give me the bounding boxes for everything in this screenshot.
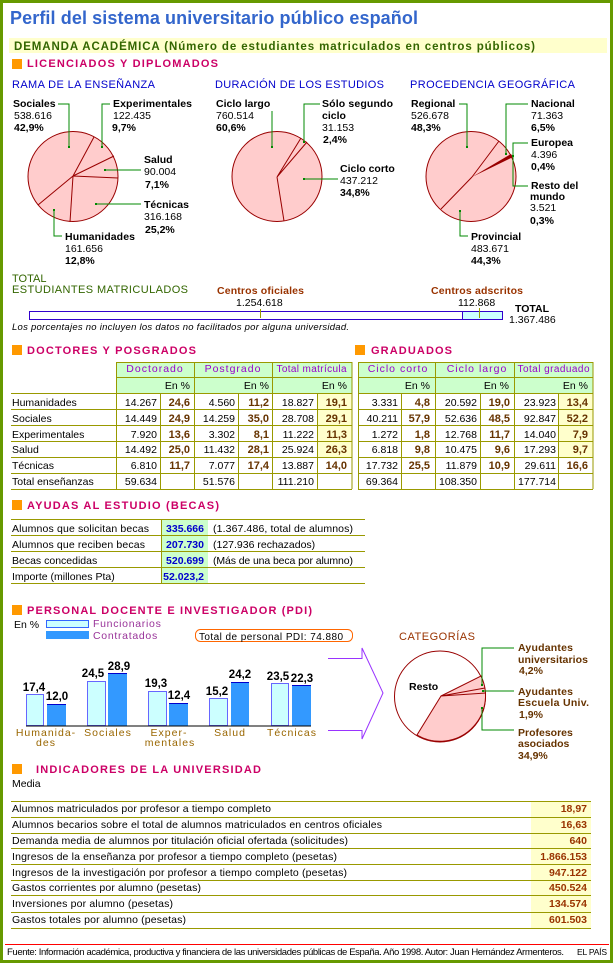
label: ayudantes universitarios: 4,2% — [519, 665, 544, 677]
label: ciclo largo: Ciclo largo — [216, 98, 270, 110]
table: graduados: 25,5 — [409, 460, 430, 472]
label: sólo segundo ciclo: 31.153 — [322, 122, 354, 134]
label: sólo segundo ciclo — [322, 98, 393, 146]
label: resto del mundo: Resto del — [531, 180, 578, 192]
panel: rama de la enseñanza — [12, 78, 192, 267]
heading: indicadores de la universidad: INDICADORES DE LA UNIVERSIDAD — [36, 764, 261, 776]
bar chart: personal docente: 23,5 — [267, 671, 290, 683]
table: graduados: 57,9 — [409, 413, 430, 425]
label: regional — [411, 98, 455, 134]
table: indicadores: 947.122 — [549, 867, 587, 879]
bar chart: personal docente: Técnicas — [267, 727, 317, 739]
legend — [14, 618, 162, 642]
leader lines: procedencia — [459, 104, 528, 236]
label: europea: 0,4% — [531, 161, 556, 173]
panel: procedencia geográfica — [410, 78, 578, 267]
table: graduados: 11,7 — [489, 429, 510, 441]
legend: Funcionarios — [93, 618, 162, 630]
label: ciclo largo: 60,6% — [216, 122, 246, 134]
table: indicadores: Gastos totales por alumno (pesetas) — [12, 914, 186, 926]
table: graduados: 11.879 — [446, 460, 477, 472]
table: graduados: 10,9 — [489, 460, 510, 472]
heading: personal docente e investigador: PERSONAL DOCENTE E INVESTIGADOR (PDI) — [27, 605, 312, 617]
table: graduados: Total graduado — [518, 364, 590, 375]
table: graduados: En % — [405, 380, 430, 392]
bar chart: personal docente: 19,3 — [145, 678, 167, 690]
label: salud: 90.004 — [144, 166, 176, 178]
table: doctores y posgrados: En % — [244, 380, 269, 392]
title: Perfil del sistema universitario público español — [10, 8, 418, 28]
table: graduados: 4,8 — [415, 397, 430, 409]
label: centros oficiales — [217, 285, 304, 309]
table: becas: 520.699 — [166, 555, 204, 567]
label: regional: 526.678 — [411, 110, 449, 122]
table: doctores y posgrados: 35,0 — [248, 413, 269, 425]
bar chart: personal docente: 28,9 — [108, 661, 130, 673]
table: graduados: 69.364 — [366, 476, 398, 488]
table: graduados: 52.636 — [445, 413, 477, 425]
label: provincial: 44,3% — [471, 255, 501, 267]
table: doctores y posgrados: 25,0 — [169, 444, 190, 456]
table: graduados: 16,6 — [567, 460, 588, 472]
label: ciclo corto — [340, 163, 395, 199]
label: europea: 4.396 — [531, 149, 557, 161]
table: indicadores: 640 — [569, 835, 587, 847]
table: doctores y posgrados: En % — [322, 380, 347, 392]
note: Los porcentajes no incluyen los datos no facilitados por alguna universidad. — [12, 322, 349, 333]
label: sociales — [13, 98, 56, 134]
leader lines: categorías — [481, 648, 514, 730]
panel: duración de los estudios: DURACIÓN DE LOS ESTUDIOS — [215, 78, 384, 91]
label: centros oficiales: 1.254.618 — [236, 297, 283, 309]
table: doctores y posgrados: 51.576 — [203, 476, 235, 488]
label: experimentales — [112, 98, 192, 134]
table: graduados: 9,7 — [573, 444, 588, 456]
label: sociales: Sociales — [13, 98, 56, 110]
label: ayudantes escuela univ: 1,9% — [519, 709, 544, 721]
label: humanidades: Humanidades — [65, 231, 135, 243]
table: doctores y posgrados: 111.210 — [278, 476, 314, 488]
table: graduados: 19,0 — [489, 397, 510, 409]
table: indicadores: Inversiones por alumno (pesetas) — [12, 898, 173, 910]
panel: duración de los estudios — [215, 78, 395, 222]
label: ayudantes universitarios: universitarios — [518, 654, 588, 666]
label: provincial — [471, 231, 521, 267]
table: doctores y posgrados — [11, 362, 352, 490]
table: graduados: 17.732 — [366, 460, 398, 472]
label: total — [509, 303, 556, 326]
legend: Contratados — [93, 630, 158, 642]
label: centros adscritos: Centros adscritos — [431, 285, 523, 297]
label: ciclo largo — [216, 98, 270, 134]
table: graduados: Ciclo corto — [368, 363, 428, 375]
table: graduados: 9,8 — [415, 444, 430, 456]
table: indicadores: 134.574 — [549, 898, 587, 910]
bar chart: personal docente: Humanida- — [16, 727, 76, 739]
label: ayudantes universitarios — [518, 642, 588, 677]
table: becas: (Más de una beca por alumno) — [213, 555, 353, 567]
table: graduados: 17.293 — [524, 444, 556, 456]
table: doctores y posgrados: 25.924 — [282, 444, 314, 456]
table: doctores y posgrados: 28.708 — [282, 413, 314, 425]
label: salud: 7,1% — [145, 179, 170, 191]
table: doctores y posgrados: 4.560 — [209, 397, 235, 409]
label: técnicas: Técnicas — [144, 199, 189, 211]
panel: total estudiantes matriculados — [12, 273, 556, 333]
table: becas: (127.936 rechazados) — [213, 539, 315, 551]
table: graduados: 40.211 — [367, 413, 398, 425]
table: doctores y posgrados: 29,1 — [326, 413, 347, 425]
panel: rama de la enseñanza: RAMA DE LA ENSEÑANZA — [12, 78, 156, 91]
label: sociales: 538.616 — [14, 110, 52, 122]
label: sociales: 42,9% — [14, 122, 44, 134]
table: becas: Alumnos que solicitan becas — [12, 523, 149, 535]
label: experimentales: Experimentales — [113, 98, 192, 110]
table: doctores y posgrados: 13,6 — [169, 429, 190, 441]
table: graduados: 12.768 — [445, 429, 477, 441]
table: becas: 207.730 — [166, 539, 204, 551]
leader lines: duración — [271, 104, 338, 180]
pie chart: categorías — [394, 651, 486, 742]
table: graduados: 6.818 — [372, 444, 398, 456]
bar chart: personal docente: 24,2 — [229, 669, 251, 681]
table: becas: Alumnos que reciben becas — [12, 539, 145, 551]
bar chart: personal docente: 15,2 — [206, 686, 228, 698]
table: doctores y posgrados: 14.267 — [125, 397, 157, 409]
label: resto del mundo: 0,3% — [530, 215, 555, 227]
table: doctores y posgrados: 11.432 — [204, 444, 235, 456]
bar chart: personal docente: 24,5 — [82, 668, 105, 680]
table: doctores y posgrados: 6.810 — [131, 460, 157, 472]
label: centros adscritos: 112.868 — [458, 297, 495, 309]
footer: Fuente: Información académica, productiva y financiera de las universidades públicas de España. Año 1998. Autor: Juan Hernández Armenteros. — [7, 947, 564, 958]
label: ayudantes escuela univ: Escuela Univ. — [518, 697, 589, 709]
label: salud: Salud — [144, 154, 173, 166]
label: ciclo corto: 437.212 — [340, 175, 378, 187]
label: nacional: 6,5% — [531, 122, 556, 134]
table: doctores y posgrados: 14.259 — [203, 413, 235, 425]
table: doctores y posgrados: Salud — [12, 444, 39, 456]
heading: graduados: GRADUADOS — [371, 345, 452, 357]
label: profesores asociados — [518, 727, 573, 762]
table: graduados: 1.272 — [372, 429, 398, 441]
bar chart: personal docente — [16, 661, 317, 749]
table: graduados: 108.350 — [439, 476, 477, 488]
table: graduados: 13,4 — [567, 397, 589, 409]
table: doctores y posgrados: 3.302 — [209, 429, 235, 441]
bar chart: personal docente: des — [36, 737, 56, 749]
table: becas: Becas concedidas — [12, 555, 97, 567]
table: indicadores: Gastos corrientes por alumno (pesetas) — [12, 882, 201, 894]
table: graduados: 177.714 — [518, 476, 556, 488]
table: doctores y posgrados: 11,7 — [169, 460, 190, 472]
label: resto del mundo — [530, 180, 578, 227]
label: resto del mundo: 3.521 — [530, 202, 556, 214]
label: ciclo corto: 34,8% — [340, 187, 370, 199]
bar chart: personal docente: Sociales — [84, 727, 132, 739]
table: graduados: En % — [563, 380, 588, 392]
table: indicadores: 601.503 — [549, 914, 587, 926]
label: humanidades: 12,8% — [65, 255, 95, 267]
label: profesores asociados: asociados — [518, 738, 570, 750]
legend: En % — [14, 619, 39, 631]
table: graduados: 20.592 — [445, 397, 477, 409]
label: humanidades — [65, 231, 135, 267]
table: graduados: 7,9 — [573, 429, 588, 441]
label: media: Media — [12, 778, 41, 790]
table: indicadores: 16,63 — [561, 819, 587, 831]
bar chart: personal docente: mentales — [145, 737, 195, 749]
table: indicadores: Alumnos matriculados por profesor a tiempo completo — [12, 803, 271, 815]
pie chart: categorías: Resto — [409, 681, 438, 693]
heading: categorías: CATEGORÍAS — [399, 630, 475, 643]
label: humanidades: 161.656 — [65, 243, 103, 255]
table: graduados: En % — [484, 380, 509, 392]
table: doctores y posgrados: Técnicas — [12, 460, 54, 472]
table: doctores y posgrados: 19,1 — [326, 397, 347, 409]
bar chart: personal docente: Salud — [214, 727, 246, 739]
table: graduados: 92.847 — [524, 413, 556, 425]
label: nacional: 71.363 — [531, 110, 563, 122]
label: sólo segundo ciclo: Sólo segundo — [322, 98, 393, 110]
table: graduados: 23.923 — [524, 397, 556, 409]
label: ciclo largo: 760.514 — [216, 110, 254, 122]
table: doctores y posgrados: 14.449 — [125, 413, 157, 425]
label: europea — [531, 137, 573, 173]
label: total: 1.367.486 — [509, 314, 556, 326]
table: doctores y posgrados: 11,2 — [248, 397, 269, 409]
label: sólo segundo ciclo: 2,4% — [323, 134, 348, 146]
table: indicadores: 1.866.153 — [540, 851, 587, 863]
label: ayudantes escuela univ: Ayudantes — [518, 686, 573, 698]
panel: procedencia geográfica: PROCEDENCIA GEOGRÁFICA — [410, 78, 576, 91]
label: profesores asociados: Profesores — [518, 727, 573, 739]
label: ciclo corto: Ciclo corto — [340, 163, 395, 175]
label: técnicas: 25,2% — [145, 224, 175, 236]
table: doctores y posgrados: Sociales — [12, 413, 52, 425]
table: doctores y posgrados: 14.492 — [125, 444, 157, 456]
callout: total de personal: Total de personal PDI: 74.880 — [199, 632, 343, 643]
table: doctores y posgrados: 17,4 — [248, 460, 270, 472]
table: doctores y posgrados: 11,3 — [326, 429, 347, 441]
table: becas: 52.023,2 — [163, 571, 204, 583]
pie chart: rama — [28, 132, 118, 222]
label: centros adscritos — [431, 285, 523, 309]
table: becas — [11, 519, 365, 584]
table: doctores y posgrados: 24,9 — [169, 413, 190, 425]
table: doctores y posgrados: 7.920 — [131, 429, 157, 441]
label: centros oficiales: Centros oficiales — [217, 285, 304, 297]
table: graduados: Ciclo largo — [447, 363, 507, 375]
banner: demanda académica: DEMANDA ACADÉMICA (Número de estudiantes matriculados en centros públicos) — [14, 40, 535, 53]
stacked bar — [30, 308, 502, 320]
heading: total estudiantes — [12, 273, 188, 296]
table: doctores y posgrados: 11.222 — [283, 429, 314, 441]
table: doctores y posgrados: Total matrícula — [276, 364, 348, 375]
heading: total estudiantes: TOTAL — [12, 273, 46, 285]
table: doctores y posgrados: 59.634 — [125, 476, 157, 488]
table: doctores y posgrados: Humanidades — [12, 397, 77, 409]
label: experimentales: 9,7% — [112, 122, 137, 134]
bar chart: personal docente: 22,3 — [291, 673, 313, 685]
table: graduados: 48,5 — [489, 413, 510, 425]
table: doctores y posgrados: 26,3 — [326, 444, 347, 456]
table: doctores y posgrados: Experimentales — [12, 429, 84, 441]
label: total: TOTAL — [515, 303, 550, 315]
label: salud — [144, 154, 176, 191]
table: graduados: 52,2 — [567, 413, 588, 425]
table: doctores y posgrados: En % — [165, 380, 190, 392]
table: graduados: 14.040 — [524, 429, 556, 441]
table: doctores y posgrados: 14,0 — [326, 460, 347, 472]
table: becas: 335.666 — [166, 523, 204, 535]
pie chart: procedencia — [426, 132, 516, 222]
label: nacional: Nacional — [531, 98, 575, 110]
table: indicadores: Demanda media de alumnos por titulación oficial ofertada (solicitudes) — [12, 835, 348, 847]
table: graduados: 29.611 — [525, 460, 556, 472]
table: doctores y posgrados: 13.887 — [282, 460, 314, 472]
arrow: bars to categories — [328, 648, 383, 739]
label: profesores asociados: 34,9% — [518, 750, 548, 762]
label: resto del mundo: mundo — [530, 191, 565, 203]
label: europea: Europea — [531, 137, 573, 149]
pie chart: duración — [232, 132, 322, 222]
label: regional: Regional — [411, 98, 455, 110]
label: técnicas: 316.168 — [144, 211, 182, 223]
table: doctores y posgrados: Doctorado — [126, 363, 184, 375]
table: graduados: 9,6 — [495, 444, 510, 456]
label: experimentales: 122.435 — [113, 110, 151, 122]
table: indicadores: 450.524 — [549, 882, 587, 894]
banner: demanda académica — [9, 38, 607, 53]
heading: ayudas al estudio: AYUDAS AL ESTUDIO (BECAS) — [27, 500, 219, 512]
table: graduados: 3.331 — [372, 397, 398, 409]
label: nacional — [531, 98, 575, 134]
bar chart: personal docente: 12,4 — [168, 690, 191, 702]
label: provincial: 483.671 — [471, 243, 509, 255]
bar chart: personal docente: Exper- — [151, 727, 187, 739]
leader lines: rama — [53, 104, 141, 236]
table: becas: (1.367.486, total de alumnos) — [213, 523, 353, 535]
label: técnicas — [144, 199, 189, 236]
table: indicadores: 18,97 — [561, 803, 587, 815]
table: doctores y posgrados: 24,6 — [169, 397, 190, 409]
label: ayudantes universitarios: Ayudantes — [518, 642, 573, 654]
table: doctores y posgrados: 18.827 — [282, 397, 314, 409]
table: indicadores: Ingresos de la enseñanza por profesor a tiempo completo (pesetas) — [12, 851, 337, 863]
label: regional: 48,3% — [411, 122, 441, 134]
label: provincial: Provincial — [471, 231, 521, 243]
heading: total estudiantes: ESTUDIANTES MATRICULADOS — [12, 284, 188, 296]
bar chart: personal docente: 17,4 — [23, 682, 46, 694]
table: doctores y posgrados: 7.077 — [209, 460, 235, 472]
footer: EL PAÍS — [577, 947, 607, 957]
table: indicadores: Alumnos becarios sobre el total de alumnos matriculados en centros oficiales — [12, 819, 382, 831]
table: indicadores: Ingresos de la investigación por profesor a tiempo completo (pesetas) — [12, 867, 347, 879]
label: ayudantes escuela univ — [518, 686, 589, 721]
heading: doctores y posgrados: DOCTORES Y POSGRADOS — [27, 345, 196, 357]
table: graduados: 1,8 — [415, 429, 430, 441]
table: doctores y posgrados: 28,1 — [248, 444, 269, 456]
table: doctores y posgrados: Postgrado — [205, 363, 261, 375]
table: graduados — [358, 362, 593, 490]
table: indicadores — [11, 801, 591, 928]
bar chart: personal docente: 12,0 — [46, 691, 68, 703]
table: doctores y posgrados: 8,1 — [254, 429, 269, 441]
table: becas: Importe (millones Pta) — [12, 571, 115, 583]
label: sólo segundo ciclo: ciclo — [322, 110, 346, 122]
table: doctores y posgrados: Total enseñanzas — [12, 476, 94, 488]
table: graduados: 10.475 — [445, 444, 477, 456]
heading: licenciados y diplomados: LICENCIADOS Y DIPLOMADOS — [27, 58, 218, 70]
